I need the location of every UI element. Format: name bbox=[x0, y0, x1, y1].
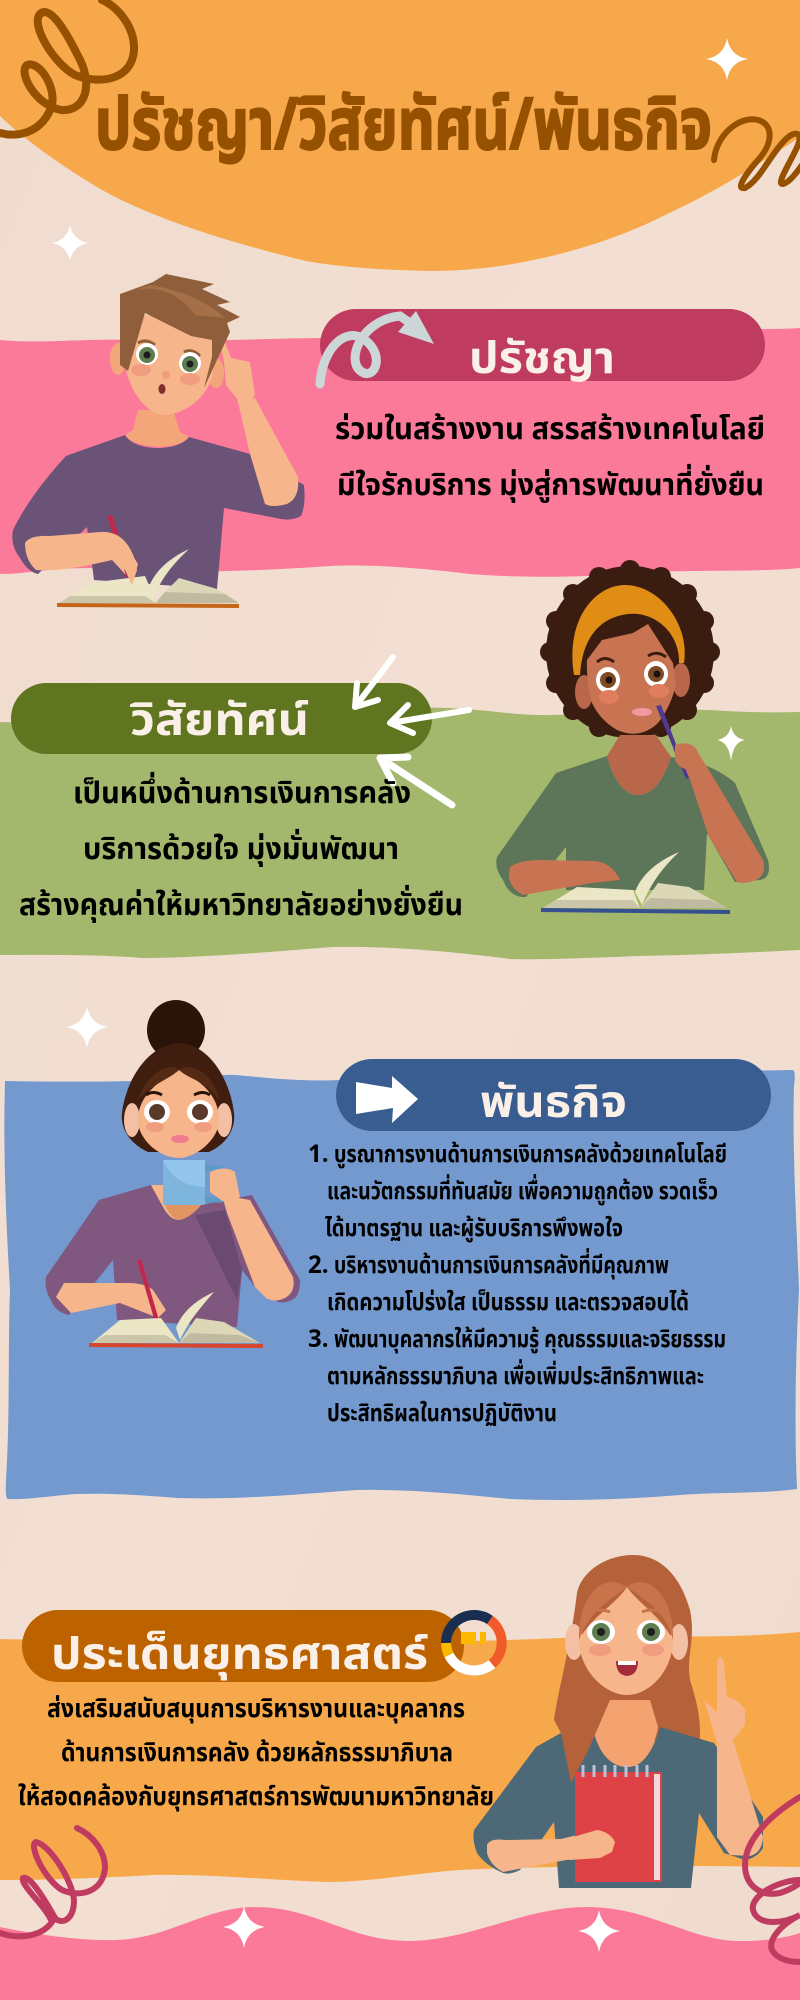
text: philosophy: ร่วมในสร้างงาน สรรสร้างเทคโนโลยี bbox=[335, 407, 765, 453]
sparkle: beside woman bbox=[717, 726, 745, 761]
text: mission list: ตามหลักธรรมาภิบาล เพื่อเพิ่มประสิทธิภาพและ bbox=[327, 1359, 704, 1395]
scribble: bottom right bbox=[745, 1797, 800, 1962]
pill: philosophy bbox=[320, 309, 765, 381]
orange header shape bbox=[0, 0, 800, 271]
pink wave footer bbox=[0, 1907, 800, 2000]
icon: ring logo bbox=[446, 1615, 502, 1671]
text: mission list: เกิดความโปร่งใส เป็นธรรม และตรวจสอบได้ bbox=[327, 1285, 689, 1321]
text: vision: สร้างคุณค่าให้มหาวิทยาลัยอย่างยั่งยืน bbox=[19, 883, 463, 929]
character: woman pointing with notebook bbox=[473, 1555, 763, 1888]
text: mission list: 1. bbox=[308, 1137, 329, 1173]
scribble: top left bbox=[0, 0, 134, 135]
pill: vision bbox=[11, 683, 432, 754]
heading: vision: วิสัยทัศน์ bbox=[130, 688, 309, 755]
heading: philosophy: ปรัชญา bbox=[469, 326, 615, 393]
text: vision: บริการด้วยใจ มุ่งมั่นพัฒนา bbox=[83, 827, 399, 873]
text: philosophy: มีใจรักบริการ มุ่งสู่การพัฒนาที่ยั่งยืน bbox=[337, 463, 764, 509]
scribble: bottom left bbox=[0, 1828, 105, 1936]
blue panel: mission bbox=[4, 1070, 799, 1500]
text: philosophy bbox=[335, 407, 765, 509]
pink band: philosophy bbox=[0, 328, 800, 577]
text: mission list: 3. bbox=[308, 1322, 329, 1358]
text: mission list: บริหารงานด้านการเงินการคลังที่มีคุณภาพ bbox=[334, 1248, 669, 1284]
character: man thinking bbox=[12, 274, 305, 606]
sparkle: mission bbox=[66, 1006, 108, 1048]
text: mission list: บูรณาการงานด้านการเงินการคลังด้วยเทคโนโลยี bbox=[334, 1137, 727, 1173]
character: woman with bun and cup bbox=[46, 1000, 300, 1346]
scribble: top right bbox=[714, 119, 800, 188]
text: strategy: ส่งเสริมสนับสนุนการบริหารงานและบุคลากร bbox=[47, 1689, 465, 1729]
sparkle: header right bbox=[706, 38, 748, 80]
green band: vision bbox=[0, 708, 800, 959]
sparkle: header left bbox=[52, 225, 88, 261]
text: mission list bbox=[308, 1137, 727, 1432]
arrow: white block bbox=[356, 1076, 418, 1123]
heading: strategy: ประเด็นยุทธศาสตร์ bbox=[51, 1622, 429, 1689]
text: strategy: ด้านการเงินการคลัง ด้วยหลักธรรมาภิบาล bbox=[61, 1733, 453, 1773]
text: strategy: ให้สอดคล้องกับยุทธศาสตร์การพัฒนามหาวิทยาลัย bbox=[18, 1777, 494, 1817]
text: strategy bbox=[18, 1689, 494, 1817]
text: mission list: และนวัตกรรมที่ทันสมัย เพื่อความถูกต้อง รวดเร็ว bbox=[327, 1174, 718, 1210]
character: woman with headband bbox=[496, 560, 769, 912]
pill: strategy bbox=[22, 1610, 464, 1682]
arrows: pointing to vision pill bbox=[355, 657, 469, 805]
sparkle: footer left bbox=[223, 1906, 265, 1948]
text: vision bbox=[19, 771, 463, 929]
orange band: strategy bbox=[0, 1632, 800, 1882]
text: mission list: ประสิทธิผลในการปฏิบัติงาน bbox=[327, 1396, 557, 1432]
arrow: curly grey bbox=[320, 311, 434, 384]
sparkle: footer right bbox=[578, 1910, 620, 1952]
text: mission list: ได้มาตรฐาน และผู้รับบริการพึงพอใจ bbox=[325, 1211, 623, 1247]
pill: mission bbox=[336, 1059, 771, 1131]
text: mission list: 2. bbox=[308, 1248, 329, 1284]
heading: mission: พันธกิจ bbox=[480, 1070, 627, 1137]
text: vision: เป็นหนึ่งด้านการเงินการคลัง bbox=[73, 771, 411, 817]
